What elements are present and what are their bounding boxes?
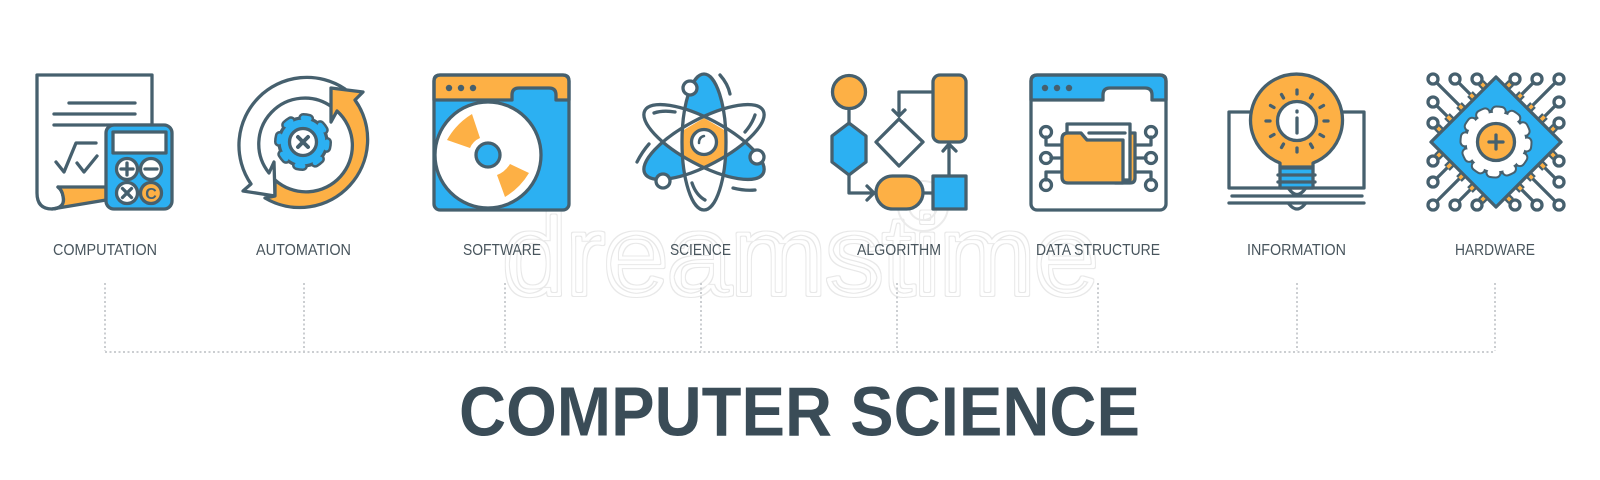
icon: hardware chip	[1428, 74, 1564, 210]
nucleus	[692, 130, 716, 154]
labels: INFORMATION	[1247, 242, 1346, 259]
labels: DATA STRUCTURE	[1036, 242, 1160, 259]
light bulb	[1250, 74, 1343, 167]
labels: SOFTWARE	[463, 242, 541, 259]
icon: data structure	[1031, 75, 1166, 210]
orbits	[634, 74, 774, 210]
gear	[1465, 111, 1527, 173]
gear	[279, 118, 327, 166]
folder	[1062, 124, 1135, 183]
icon: automation	[239, 77, 368, 207]
infographic canvas	[35, 72, 1566, 436]
labels	[53, 242, 1535, 259]
motion arcs	[637, 75, 755, 200]
icon: algorithm flowchart	[832, 75, 966, 209]
connector nodes	[1040, 126, 1156, 190]
square root and check	[56, 143, 97, 172]
labels: HARDWARE	[1455, 242, 1535, 259]
orange cycle arrow	[265, 88, 368, 207]
icon: science atom	[634, 74, 774, 210]
disc	[435, 102, 541, 208]
blue atom lobes	[634, 74, 774, 194]
icon: software	[434, 75, 569, 210]
title: COMPUTER SCIENCE	[459, 372, 1140, 450]
info symbol	[1295, 111, 1299, 133]
orange scroll	[52, 187, 106, 209]
bulb rays	[1266, 90, 1328, 152]
icon: computation	[37, 75, 172, 209]
open book	[1229, 112, 1364, 203]
dotted connector bracket	[105, 283, 1495, 352]
paper text lines	[54, 103, 135, 125]
window header	[434, 75, 569, 100]
labels: AUTOMATION	[256, 242, 351, 259]
window header	[1031, 75, 1166, 100]
labels: COMPUTATION	[53, 242, 157, 259]
labels: ALGORITHM	[857, 242, 941, 259]
calculator: C	[145, 186, 157, 203]
electrons	[656, 81, 764, 188]
circuit traces	[1428, 74, 1564, 210]
watermark: dreamstime	[503, 193, 1098, 318]
icon: information	[1229, 74, 1364, 209]
labels: SCIENCE	[670, 242, 731, 259]
